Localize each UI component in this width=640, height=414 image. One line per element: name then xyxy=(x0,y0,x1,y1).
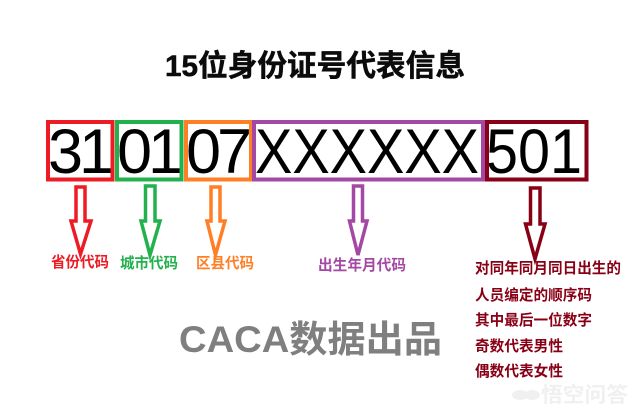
arrow: city xyxy=(141,186,160,255)
title: 15位身份证号代表信息 xyxy=(165,49,465,83)
text block: sequence code explanation: 人员编定的顺序码 xyxy=(475,286,592,304)
text block: sequence code explanation xyxy=(475,259,621,380)
box: district segment xyxy=(186,122,251,180)
box: sequence segment xyxy=(487,122,586,180)
label: city code: 城市代码 xyxy=(120,254,178,272)
ID number digits: 01 xyxy=(117,117,183,187)
box: province segment xyxy=(48,122,112,180)
label: district code: 区县代码 xyxy=(196,255,254,272)
ID number digits: 501 xyxy=(486,117,582,187)
ID number digits: 07 xyxy=(186,117,252,187)
label: birth date code: 出生年月代码 xyxy=(318,256,406,274)
ID number digits: XXXXXX xyxy=(255,117,479,187)
arrow: district xyxy=(207,187,225,255)
text block: sequence code explanation: 奇数代表男性 xyxy=(475,337,563,355)
text block: sequence code explanation: 其中最后一位数字 xyxy=(475,311,592,329)
arrow: birth date xyxy=(350,186,367,255)
watermark: Wukong Wenda logo xyxy=(512,383,628,407)
watermark: Wukong Wenda logo: 悟空问答 xyxy=(541,383,628,407)
ID number digits: 31 xyxy=(48,117,114,187)
watermark: CACA data: CACA数据出品 xyxy=(179,319,442,360)
text block: sequence code explanation: 对同年同月同日出生的 xyxy=(475,259,621,277)
ID number digits xyxy=(48,117,582,187)
arrow: province xyxy=(71,187,91,254)
box: birth date segment xyxy=(254,122,483,180)
box: city segment xyxy=(117,122,182,180)
text block: sequence code explanation: 偶数代表女性 xyxy=(475,362,563,380)
arrow: sequence xyxy=(526,188,545,259)
label: province code: 省份代码 xyxy=(51,254,109,271)
